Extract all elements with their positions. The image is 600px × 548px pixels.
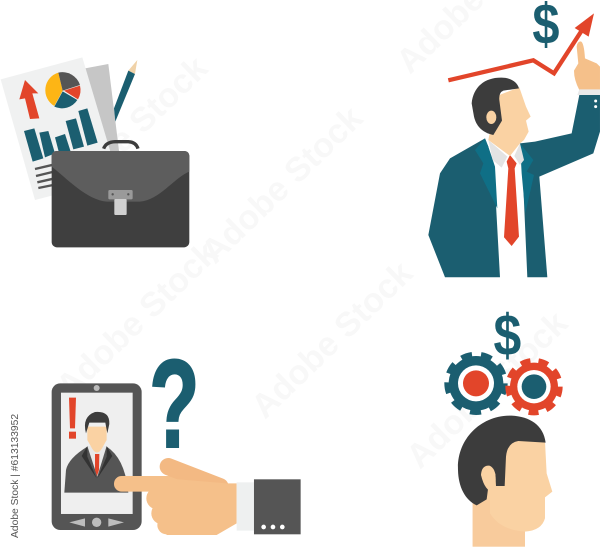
jacket sleeve (254, 479, 301, 534)
collar (488, 140, 507, 168)
icon: businessman pointing at rising chart (428, 0, 600, 277)
icon: briefcase with documents (1, 57, 189, 247)
stock credit: Adobe Stock | #613133952 (10, 414, 21, 538)
exclamation mark (69, 398, 76, 439)
tie (504, 155, 519, 246)
red up arrow (19, 80, 39, 119)
text lines (35, 164, 55, 188)
hair (472, 78, 519, 135)
hair (458, 416, 546, 505)
handle (104, 142, 138, 149)
head (473, 440, 552, 547)
hand pointing up (574, 41, 600, 90)
question mark: ? (149, 335, 200, 474)
watermarks: Adobe Stock (39, 49, 215, 221)
dollar sign: $ (493, 302, 521, 368)
clasp (108, 190, 133, 215)
phone screen (61, 393, 133, 514)
cuff (577, 89, 600, 96)
pointing hand (114, 467, 237, 535)
lapels (475, 138, 534, 213)
orange gear (509, 361, 559, 412)
case flap (52, 151, 189, 202)
watermarks: Adobe Stock (49, 234, 225, 406)
watermarks (39, 0, 575, 476)
case body (52, 151, 189, 247)
pie chart (45, 72, 81, 108)
ear (486, 111, 496, 124)
phone buttons (69, 518, 124, 527)
camera (94, 385, 100, 391)
neck and face (488, 87, 531, 156)
watermarks: Adobe Stock (194, 99, 370, 271)
sleeve buttons (261, 525, 285, 529)
neck shade (473, 500, 525, 547)
phone body (52, 383, 142, 530)
grey back sheet (85, 64, 119, 153)
pencil (114, 60, 137, 122)
person on screen (64, 412, 128, 493)
watermarks: Adobe Stock (399, 304, 575, 476)
shirt (488, 142, 530, 277)
cuff buttons (594, 99, 597, 108)
shirt cuff (237, 482, 254, 531)
teal gear (448, 355, 504, 412)
icon: phone with profile and pointing hand (52, 335, 301, 535)
report sheet (1, 57, 118, 200)
rising red arrow (448, 13, 594, 80)
ear (481, 466, 496, 492)
icon: head with gears (448, 302, 559, 547)
bar chart (24, 108, 98, 162)
jacket (428, 95, 600, 277)
watermarks: Adobe Stock (244, 254, 420, 426)
